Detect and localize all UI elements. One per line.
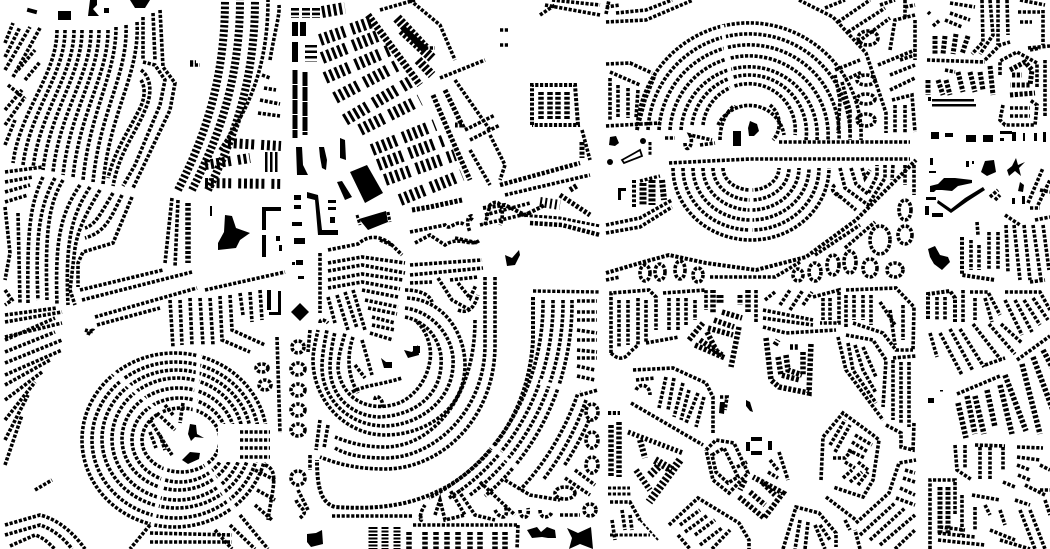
panel: third estate spoke <box>490 382 580 470</box>
panel: columns beside the arterial <box>165 198 188 267</box>
panel: south middle thick rows <box>689 290 811 393</box>
panel: triangle estate <box>608 413 683 540</box>
panel: far east fan <box>958 350 1050 438</box>
panel: road blocks above second estate <box>480 185 590 225</box>
panel: far east small rows by road <box>990 168 1050 225</box>
panel: x-shaped housing band <box>178 0 255 190</box>
panel: outlying rows north centre east <box>190 0 600 195</box>
panel: rows around first circle <box>130 290 280 549</box>
panel: civic buildings centre <box>27 0 593 549</box>
icon: central buildings <box>733 121 759 146</box>
chart: third ring estate arcs <box>317 291 600 508</box>
panel: north-west curving neighbourhood <box>5 10 175 305</box>
panel: east lobes of third estate <box>555 301 598 516</box>
panel: south middle top band <box>611 288 914 358</box>
panel: diagonal rows north centre east <box>368 15 432 85</box>
panel: civic frame rows <box>357 130 600 235</box>
panel: far east curved rows <box>928 290 1050 394</box>
panel: north centre west columns <box>295 8 316 138</box>
chart: first concentric circle estate <box>82 345 274 535</box>
panel: far east south rows <box>930 445 1050 549</box>
panel: east west road rows <box>606 123 910 163</box>
icon: central buildings <box>182 424 204 464</box>
panel: south lobes of third estate <box>332 480 580 520</box>
east gap of circle <box>218 424 274 462</box>
panel: south east rows of middle block <box>783 460 916 549</box>
panel: wiggly rows north of second estate <box>328 202 502 255</box>
panel: south middle fan east <box>838 335 916 450</box>
panel: upper mid column rows <box>220 0 280 150</box>
panel: far east top rows <box>927 0 1050 125</box>
panel: pod estate <box>706 440 788 493</box>
panel: second estate straight rows <box>320 253 483 340</box>
inner wedge rows of circle <box>150 403 270 457</box>
chart: second ring estate <box>313 277 495 469</box>
panel: small civic items beside road <box>607 136 650 200</box>
panel: west lobes of second estate <box>291 330 328 518</box>
panel: west pocket of semicircle <box>606 0 693 130</box>
panel: east pocket of semicircle <box>799 0 915 133</box>
panel: blocks south-west of lower semicircle <box>606 176 672 233</box>
panel: wave rows south of semicircle <box>606 160 916 282</box>
panel: far east black bars <box>925 97 1046 403</box>
panel: thick block cluster west <box>205 143 282 184</box>
panel: far east mid columns <box>962 222 1049 282</box>
panel: hexagon estate <box>821 413 879 497</box>
panel: thick rectangle estate <box>739 477 783 518</box>
chart: top right semicircular estate <box>637 23 861 146</box>
panel: south middle small buildings <box>719 400 772 455</box>
panel: north-west arterial road rows <box>5 270 285 337</box>
panel: south row estate <box>373 525 518 549</box>
panel: pocket east of lower semicircle <box>840 165 914 205</box>
panel: south-west corner rows <box>5 318 85 549</box>
panel: rectangular estate north of road <box>532 85 578 125</box>
panel: south middle fan west <box>631 368 727 445</box>
panel: south middle bottom rows <box>669 498 749 549</box>
panel: thick fan blocks north centre <box>320 8 462 200</box>
chart: lower semicircular estate <box>673 160 829 240</box>
